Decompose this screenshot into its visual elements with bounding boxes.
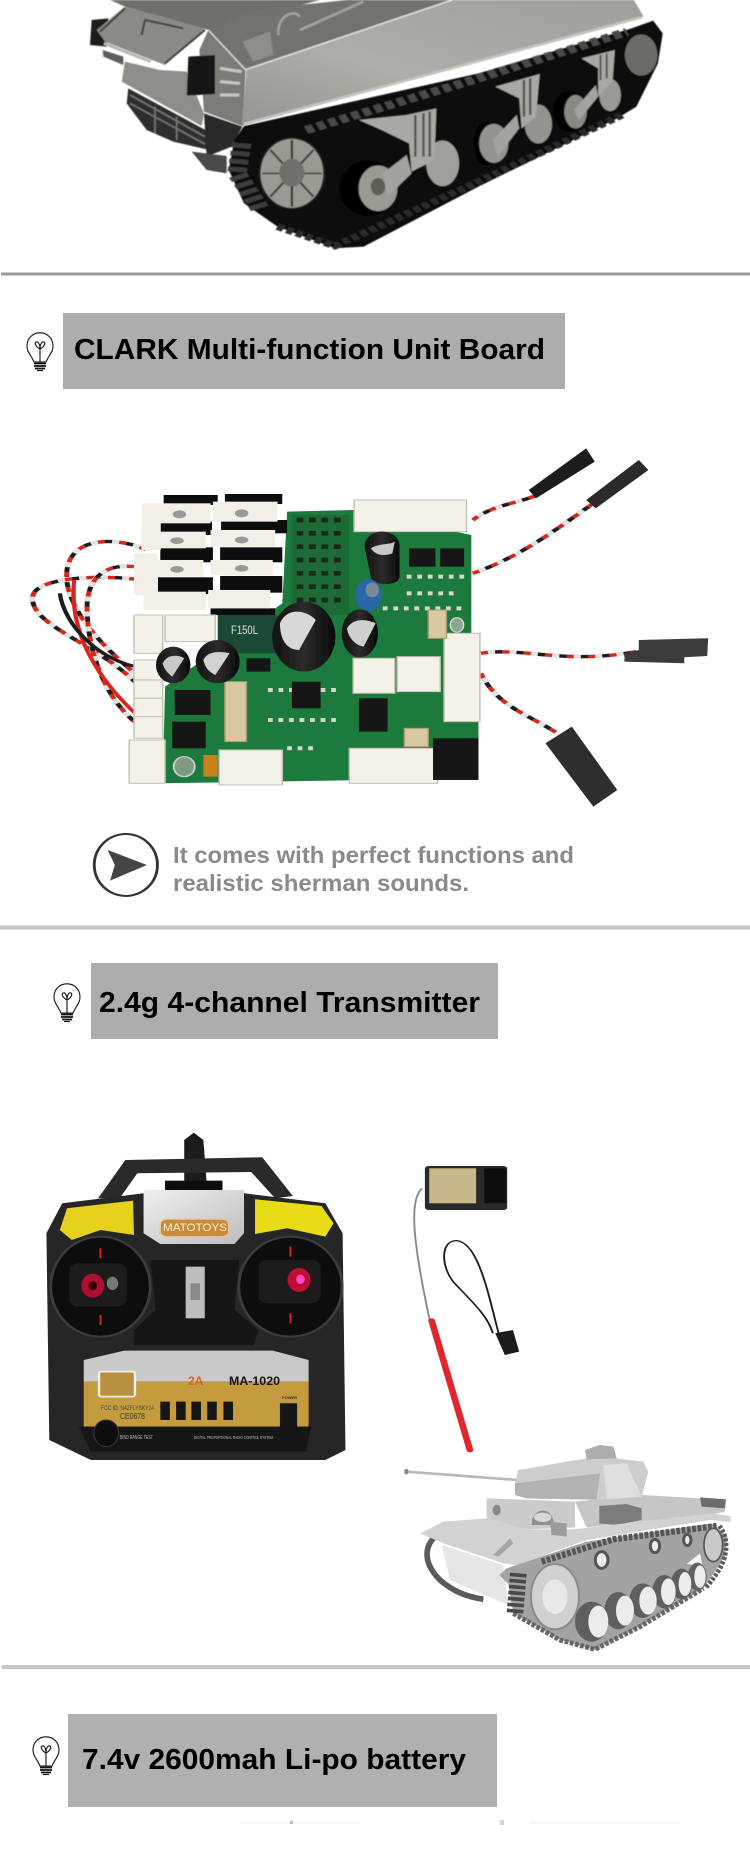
handle	[98, 1157, 293, 1198]
antenna wire	[414, 1188, 430, 1320]
heading bar	[68, 1714, 497, 1807]
superstructure	[487, 1498, 575, 1529]
transmitter labels: DIGITAL PROPORTIONAL RADIO CONTROL SYSTEM	[194, 1435, 273, 1440]
wires left	[32, 542, 146, 728]
badge	[160, 1219, 229, 1237]
road wheels	[575, 1563, 707, 1642]
tank rear section	[90, 0, 452, 173]
note text: realistic sherman sounds.	[173, 870, 469, 896]
photo: faded panzer tank	[404, 1445, 731, 1650]
turret	[515, 1445, 648, 1500]
slider	[186, 1267, 205, 1318]
icon: light bulb	[54, 984, 80, 1022]
note text	[173, 842, 574, 896]
photo: receiver and antenna	[414, 1166, 519, 1450]
heading: transmitter	[54, 963, 498, 1039]
note text: It comes with perfect functions and	[173, 842, 574, 868]
centre block	[134, 1260, 258, 1345]
photo: sherman tank lower hull	[90, 0, 663, 248]
heading text: 7.4v 2600mah Li-po battery	[82, 1744, 466, 1776]
yellow panels	[60, 1201, 134, 1240]
far track	[427, 1535, 483, 1599]
silver plate	[144, 1190, 244, 1244]
return rollers	[595, 1534, 691, 1568]
icon: light bulb	[33, 1737, 59, 1774]
photo: 2.4g transmitter	[46, 1133, 345, 1460]
pcb	[163, 510, 478, 783]
antenna	[184, 1133, 207, 1183]
heading: battery	[33, 1714, 497, 1807]
red antenna tip	[432, 1321, 470, 1450]
bogies	[359, 108, 436, 172]
wires right	[473, 496, 636, 733]
white connectors	[129, 500, 480, 785]
transmitter labels: CE0678	[120, 1412, 145, 1421]
label panel	[84, 1351, 309, 1382]
road wheels	[339, 78, 622, 217]
upper hull	[420, 1513, 731, 1567]
transmitter labels: 2A	[188, 1374, 204, 1388]
heading: CLARK board	[27, 313, 565, 389]
transmitter labels	[101, 1222, 297, 1441]
gun barrel	[407, 1472, 540, 1482]
photo: multi-function circuit board	[32, 448, 708, 807]
running gear	[499, 1523, 727, 1650]
transmitter labels: POWER	[282, 1395, 297, 1400]
note: perfect functions	[94, 834, 574, 896]
heading bar	[63, 313, 565, 389]
divider 2	[0, 926, 750, 930]
inductor	[218, 615, 278, 653]
drive wheel	[259, 138, 324, 209]
servo plugs	[529, 448, 595, 498]
chips	[172, 548, 478, 780]
engine deck	[575, 1495, 725, 1527]
front plate	[442, 1545, 508, 1605]
sprocket	[531, 1564, 579, 1629]
bind plug	[495, 1330, 519, 1355]
body	[46, 1193, 345, 1460]
bind lead	[444, 1241, 499, 1333]
faint specks under battery heading	[240, 1820, 680, 1825]
transmitter labels: MATOTOYS	[163, 1222, 227, 1234]
sprocket	[625, 34, 657, 76]
divider 3	[2, 1665, 750, 1669]
divider 1	[1, 272, 750, 276]
tracks	[229, 21, 663, 248]
transmitter labels: BIND RANGE TEST	[120, 1435, 153, 1441]
sticks	[51, 1237, 150, 1337]
inductor label: F150L	[231, 623, 258, 637]
transmitter labels: FCC ID: N4ZFLYSKY14	[101, 1406, 155, 1412]
side plate	[242, 0, 644, 126]
receiver	[425, 1166, 507, 1210]
heat sinks	[158, 494, 287, 615]
heading text: CLARK Multi-function Unit Board	[74, 334, 545, 366]
heading text: 2.4g 4-channel Transmitter	[99, 987, 480, 1019]
heading bar	[91, 963, 498, 1039]
transmitter labels: MA-1020	[229, 1374, 280, 1388]
capacitors	[365, 532, 400, 584]
icon: light bulb	[27, 333, 53, 370]
icon: arrow in circle	[94, 834, 157, 896]
